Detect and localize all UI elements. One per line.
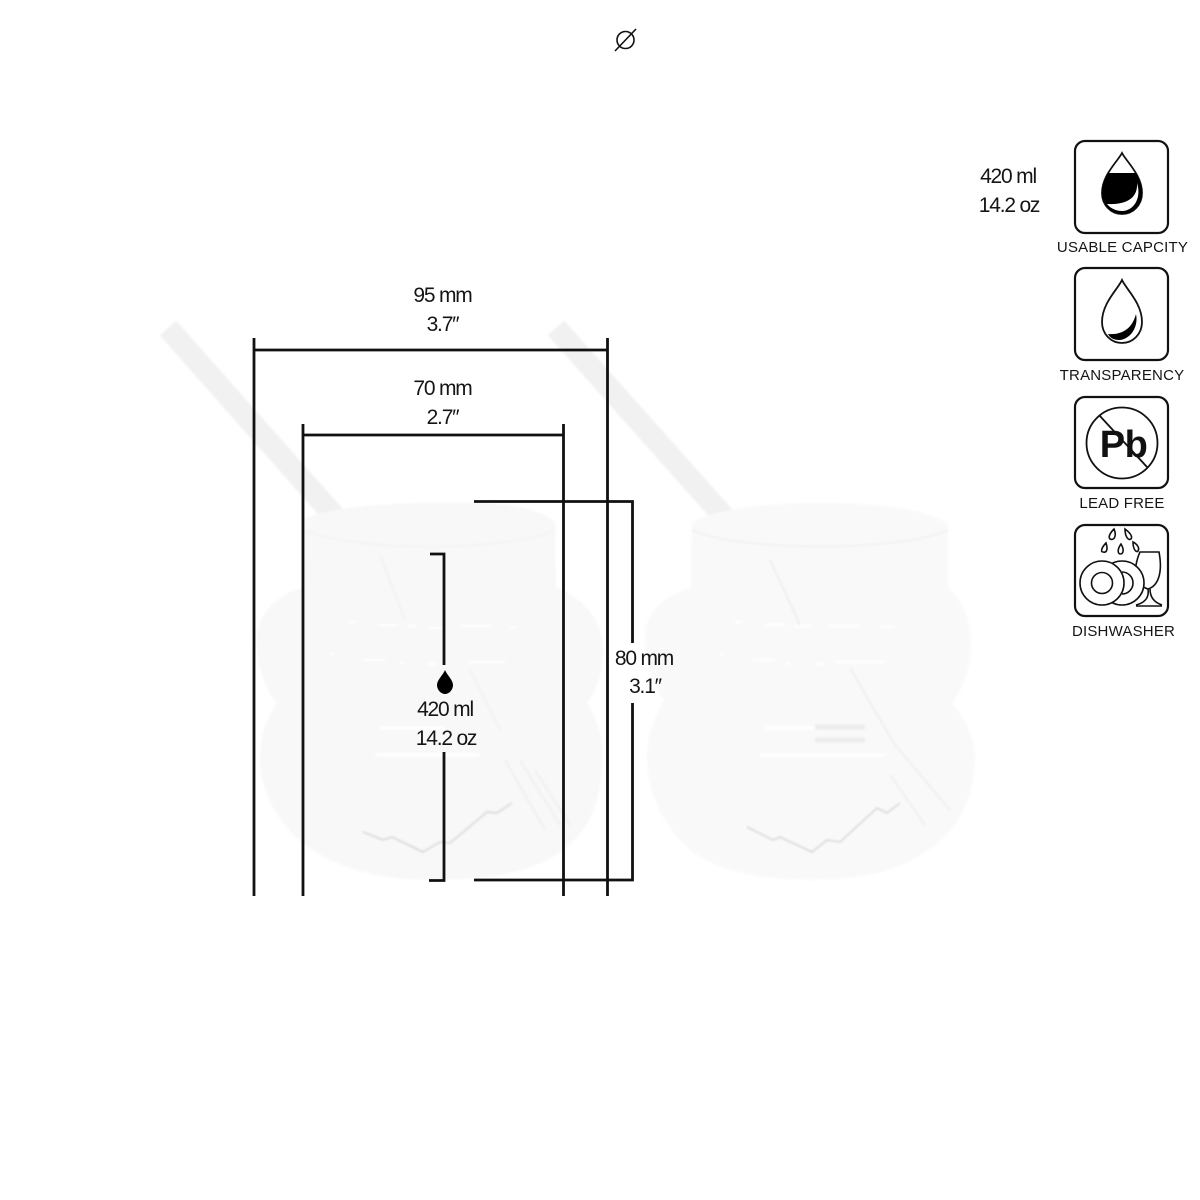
dimension: rim width 70 mm	[303, 377, 564, 896]
left glass with straw	[168, 328, 603, 880]
dimension: capacity 420 ml: 14.2 oz	[416, 727, 477, 750]
dimension: outer width 95 mm: 95 mm	[413, 284, 472, 307]
icon: lead free	[1075, 397, 1168, 488]
label: transparency: TRANSPARENCY	[1060, 367, 1184, 384]
label: dishwasher: DISHWASHER	[1072, 623, 1175, 640]
icon: capacity drop	[437, 670, 453, 694]
right glass with straw	[556, 328, 975, 880]
dimension: outer width 95 mm: 3.7″	[427, 313, 460, 336]
capacity value text: 420 ml	[980, 165, 1036, 188]
label: lead free: LEAD FREE	[1079, 495, 1165, 512]
dimension: height 80 mm: 3.1″	[629, 675, 663, 698]
dimension: rim width 70 mm: 70 mm	[413, 377, 472, 400]
icon: usable capacity	[1075, 141, 1168, 233]
label: usable capacity: USABLE CAPCITY	[1057, 239, 1188, 256]
dimension: height 80 mm: 80 mm	[615, 647, 674, 670]
capacity value text	[979, 165, 1040, 217]
capacity value text: 14.2 oz	[979, 194, 1040, 217]
dimension: capacity 420 ml: 420 ml	[417, 698, 473, 721]
icon: lead free: Pb	[1100, 424, 1147, 466]
dimension: rim width 70 mm: 2.7″	[427, 406, 460, 429]
icon: transparency	[1075, 268, 1168, 360]
dimension: outer width 95 mm	[254, 284, 608, 896]
icon: diameter symbol	[615, 29, 636, 51]
dimension: height 80 mm	[474, 502, 674, 880]
dimension: capacity 420 ml	[416, 554, 477, 880]
icon: dishwasher	[1075, 525, 1168, 616]
